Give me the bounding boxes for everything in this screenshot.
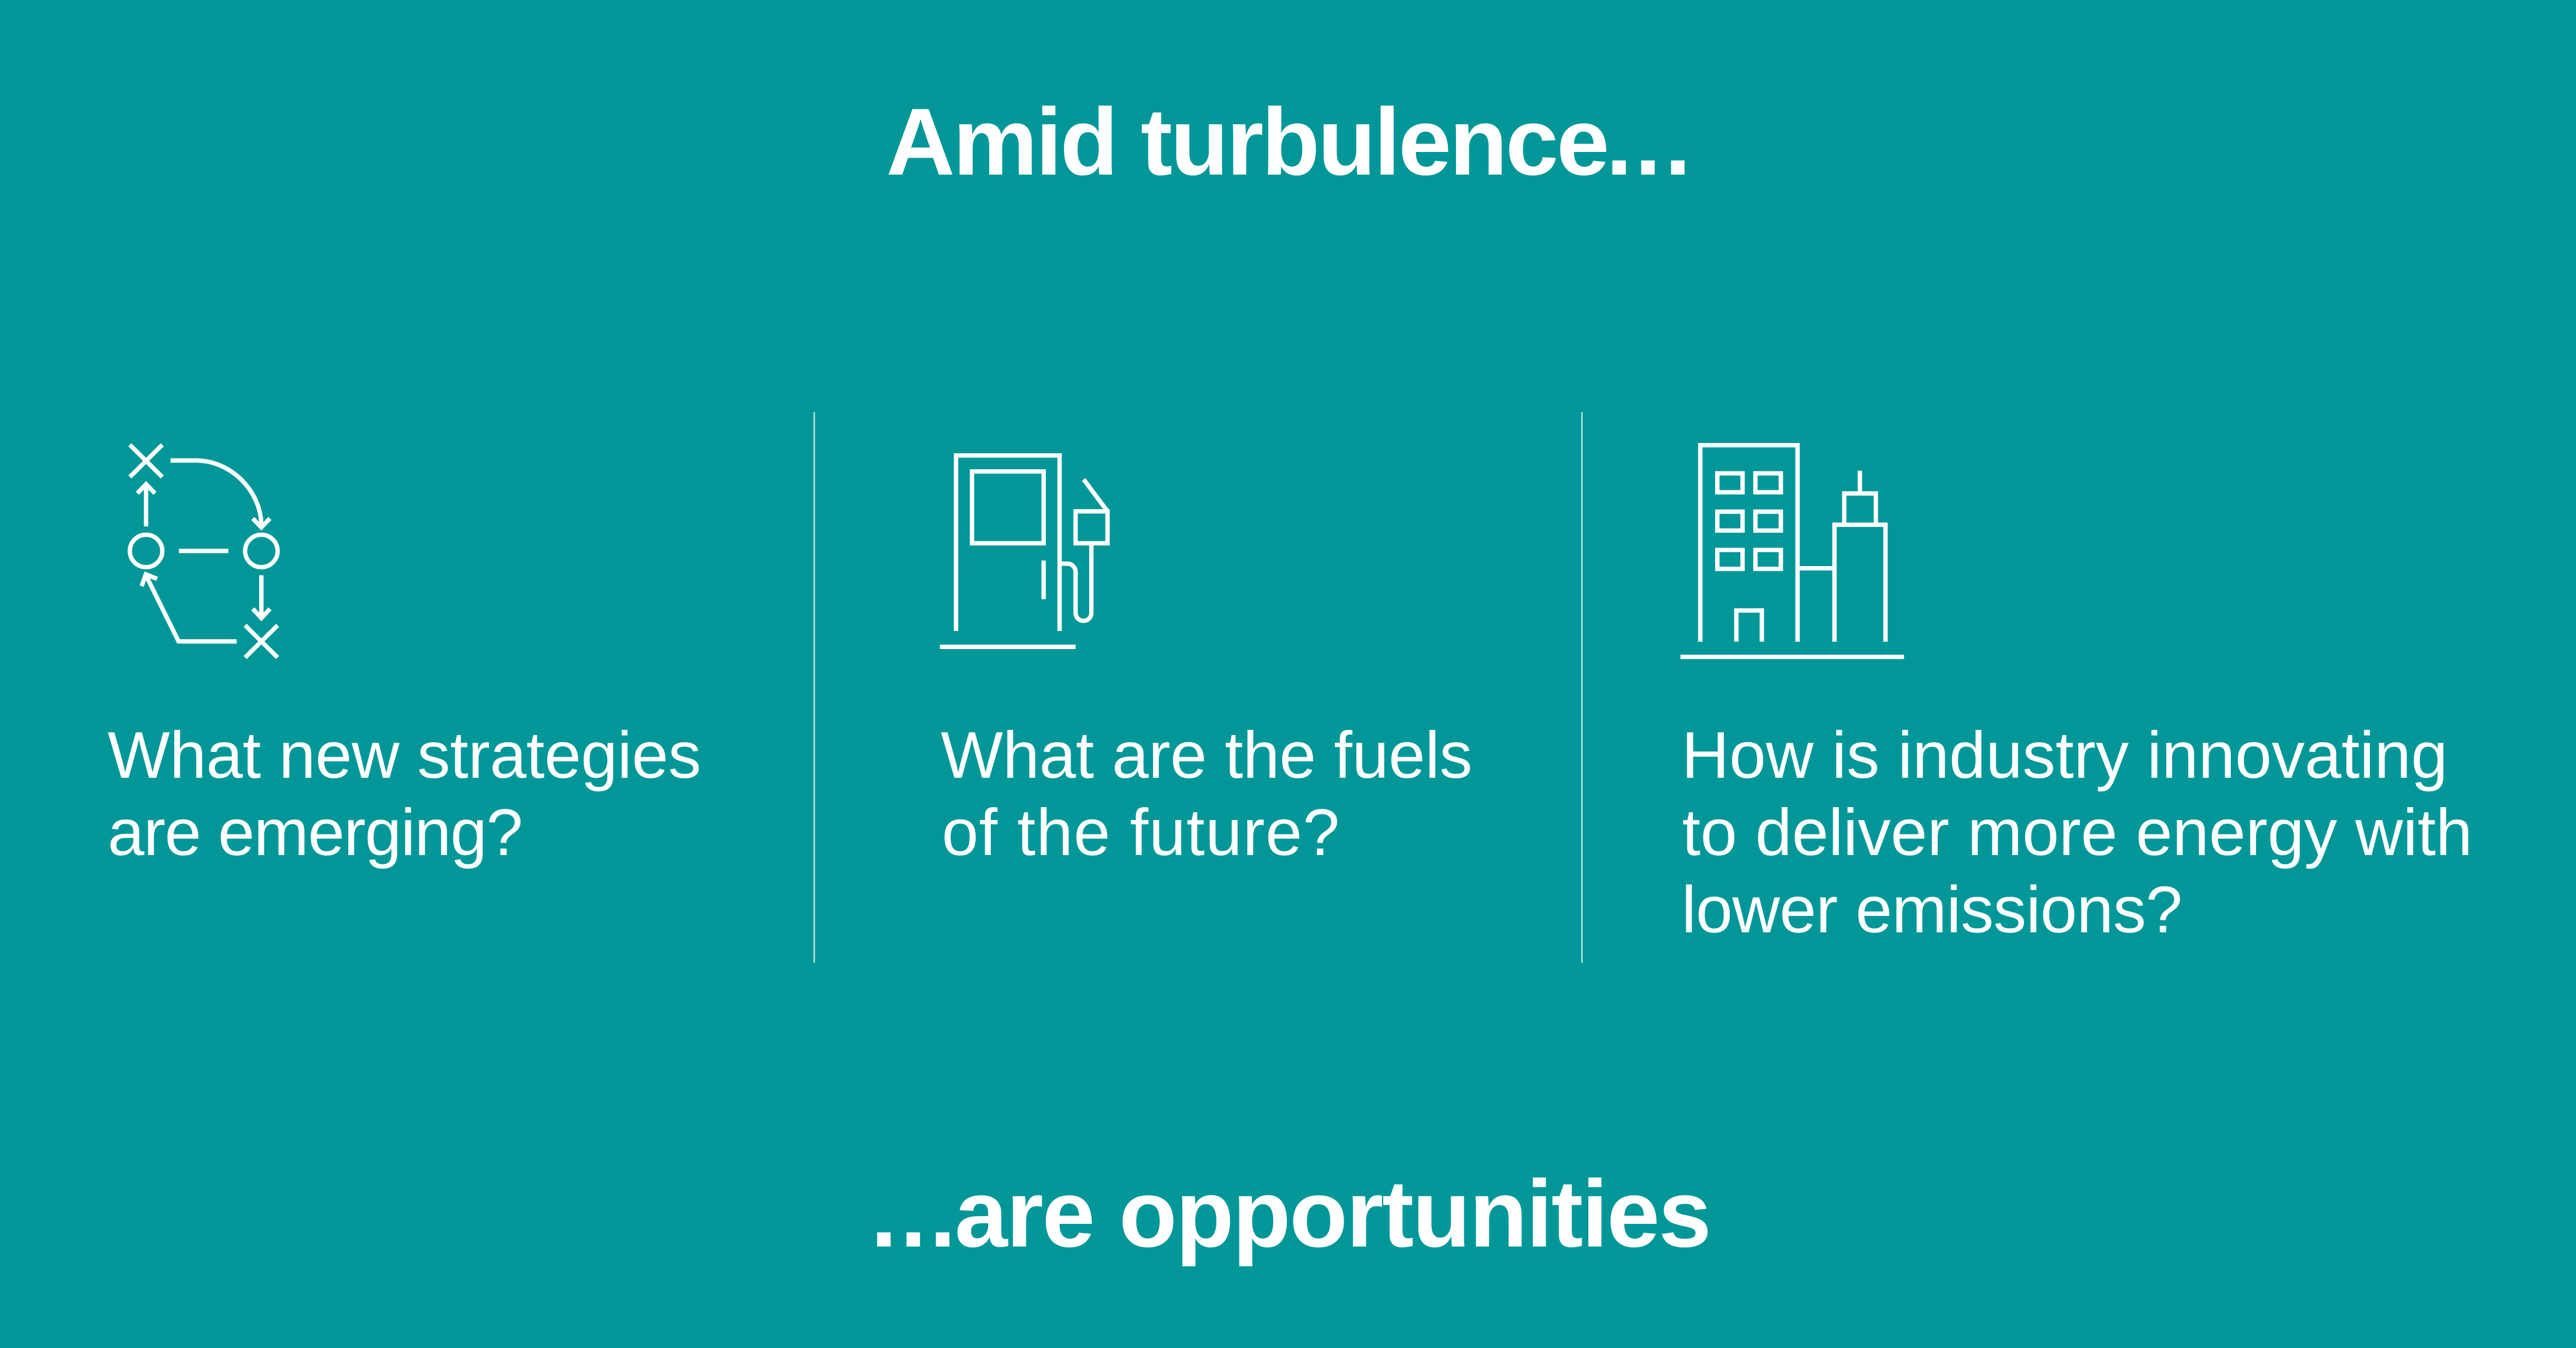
icon: city buildings bbox=[1681, 445, 1904, 657]
icon: fuel pump bbox=[940, 455, 1108, 647]
closing statement: are opportunities bbox=[955, 1161, 1711, 1267]
title: Amid turbulence bbox=[886, 89, 1609, 195]
panel: innovation bbox=[1681, 445, 2490, 947]
title: ... bbox=[1606, 89, 1691, 195]
closing statement: ... bbox=[871, 1161, 956, 1267]
question text: lower emissions? bbox=[1682, 873, 2182, 947]
question text: of the future? bbox=[942, 796, 1340, 869]
question text: What new strategies bbox=[108, 719, 701, 792]
panel: fuels bbox=[940, 455, 1490, 869]
question text: How is industry innovating bbox=[1682, 719, 2448, 792]
question text: What are the fuels bbox=[941, 719, 1472, 792]
icon: strategy diagram bbox=[130, 445, 278, 657]
question text: to deliver more energy with bbox=[1682, 796, 2472, 869]
question text: are emerging? bbox=[108, 796, 523, 869]
panel: strategies bbox=[108, 445, 719, 869]
